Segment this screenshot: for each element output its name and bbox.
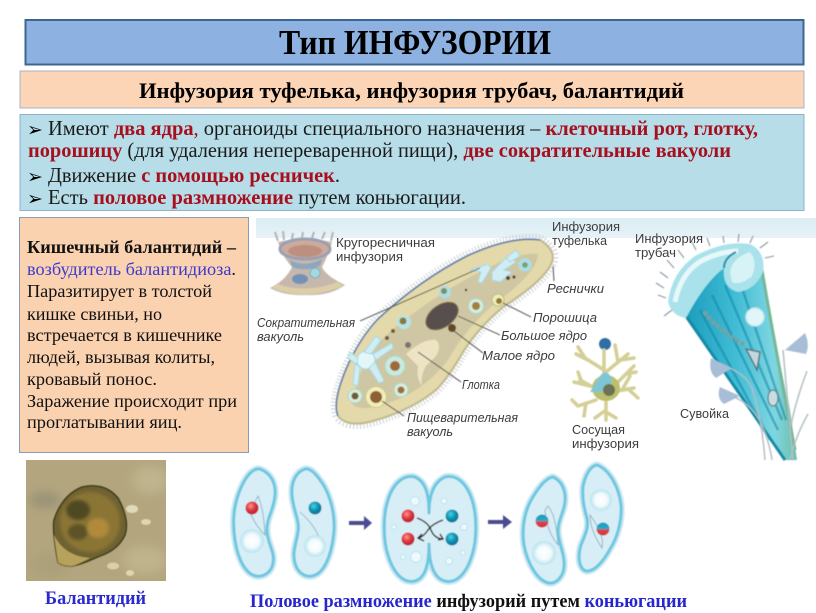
panel: balantidium text: людей, вызывая колиты, bbox=[27, 347, 215, 367]
photo: balantidium bbox=[26, 460, 168, 581]
label: Инфузория трубач: трубач bbox=[635, 245, 676, 260]
cell: conjugating pair bbox=[384, 476, 476, 581]
label: Сосущая инфузория: Сосущая bbox=[572, 422, 625, 437]
label: Сосущая инфузория: инфузория bbox=[572, 436, 639, 451]
contractile vacuoles bbox=[348, 250, 520, 386]
label: Малое ядро: Малое ядро bbox=[482, 348, 555, 363]
label: Пищеварительная вакуоль: Пищеварительная bbox=[407, 410, 518, 425]
label: Порошица: Порошица bbox=[533, 310, 597, 325]
panel: ciliates illustration bbox=[256, 218, 816, 460]
label: Инфузория трубач bbox=[635, 231, 703, 260]
caption: conjugation: Половое размножение инфузорий путем коньюгации bbox=[250, 592, 687, 612]
cell: left ciliate after conjugation bbox=[523, 477, 565, 583]
label: Инфузория туфелька: Инфузория bbox=[552, 219, 620, 234]
cell: right ciliate before conjugation bbox=[292, 469, 334, 576]
arrow bbox=[488, 515, 512, 529]
label: Кругоресничная инфузория: инфузория bbox=[336, 249, 403, 264]
label: Сократительная вакуоль: вакуоль bbox=[257, 329, 304, 344]
subtitle banner: Инфузория туфелька, инфузория трубач, балантидий bbox=[139, 78, 684, 103]
illustration: paramecium bbox=[336, 239, 554, 424]
macronucleus bbox=[421, 297, 463, 335]
label: Кругоресничная инфузория bbox=[336, 235, 435, 264]
food vacuoles bbox=[348, 258, 532, 408]
cell: right ciliate after conjugation bbox=[579, 465, 621, 571]
panel: balantidium text: проглатывании яиц. bbox=[27, 412, 182, 432]
label: Сократительная вакуоль bbox=[257, 315, 355, 344]
panel: balantidium text: встречается в кишечнике bbox=[27, 325, 222, 345]
label: Пищеварительная вакуоль bbox=[407, 410, 518, 439]
diagram: conjugation bbox=[234, 465, 621, 583]
bullet line 2: порошицу (для удаления непереваренной пищи), две сократительные вакуоли bbox=[28, 138, 731, 162]
panel: balantidium text: Заражение происходит при bbox=[27, 391, 237, 411]
label: Кругоресничная инфузория: Кругоресничная bbox=[336, 235, 435, 250]
subtitle banner bbox=[20, 71, 804, 108]
panel: characteristics bbox=[20, 114, 804, 210]
bullet line 4: Есть половое размножение путем коньюгации. bbox=[48, 185, 466, 209]
caption: Балантидий: Балантидий bbox=[45, 589, 146, 609]
title banner: Тип ИНФУЗОРИИ bbox=[279, 23, 551, 62]
label: Сосущая инфузория bbox=[572, 422, 639, 451]
illustration: suctorian bbox=[572, 338, 638, 420]
label: Реснички: Реснички bbox=[547, 281, 604, 296]
illustration: stentor trumpet ciliate bbox=[656, 234, 797, 460]
panel: balantidium text bbox=[20, 218, 248, 452]
label: Инфузория туфелька bbox=[552, 219, 620, 248]
panel: balantidium text: кровавый понос. bbox=[27, 369, 157, 389]
label: Инфузория трубач: Инфузория bbox=[635, 231, 703, 246]
cell: left ciliate before conjugation bbox=[234, 469, 275, 576]
label: Пищеварительная вакуоль: вакуоль bbox=[407, 424, 453, 439]
label: Сувойка: Сувойка bbox=[680, 406, 730, 421]
micronucleus bbox=[448, 324, 456, 332]
bullet line 4: ➢ bbox=[27, 188, 43, 210]
arrow bbox=[349, 516, 372, 530]
illustration: circular-ciliated ciliate bbox=[270, 231, 345, 295]
bullet line 3: ➢ bbox=[27, 166, 43, 188]
bullet line 1: Имеют два ядра, органоиды специального назначения – клеточный рот, глотку, bbox=[48, 116, 758, 140]
bullet line 1: ➢ bbox=[27, 119, 43, 141]
label: Большое ядро: Большое ядро bbox=[501, 328, 587, 343]
title banner bbox=[26, 20, 804, 64]
panel: balantidium text: возбудитель балантидиоза. bbox=[27, 259, 236, 279]
illustration: vorticella bbox=[710, 333, 808, 460]
panel: balantidium text: кишке свиньи, но bbox=[27, 304, 162, 324]
bullet line 3: Движение с помощью ресничек. bbox=[48, 163, 340, 187]
leader lines bbox=[360, 266, 554, 416]
label: Инфузория туфелька: туфелька bbox=[552, 233, 608, 248]
panel: balantidium text: Паразитирует в толстой bbox=[27, 281, 212, 301]
label: Сократительная вакуоль: Сократительная bbox=[257, 315, 355, 330]
label: Глотка: Глотка bbox=[462, 377, 500, 392]
cytopharynx bbox=[406, 340, 439, 386]
panel: balantidium text: Кишечный балантидий – bbox=[27, 237, 237, 257]
